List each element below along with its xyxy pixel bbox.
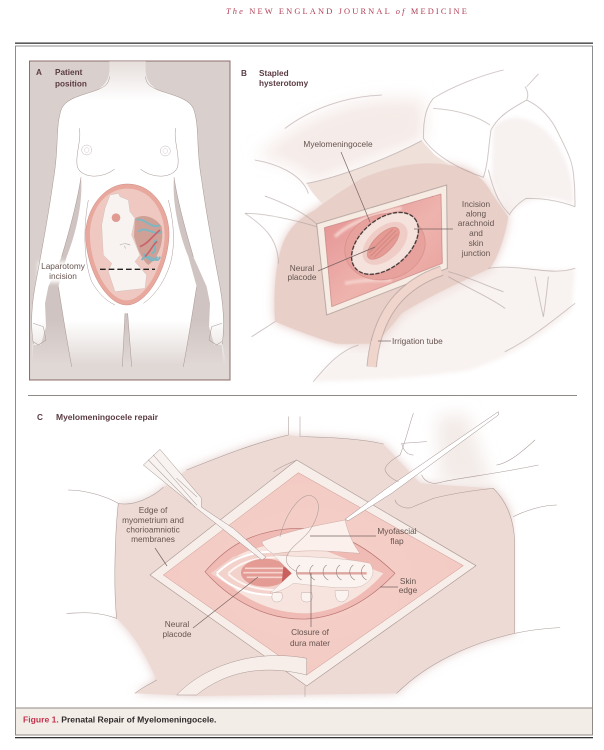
membrane edge label — [122, 505, 184, 566]
dura closure label: dura mater — [290, 638, 330, 648]
incision dashed ellipse — [340, 200, 430, 287]
journal masthead: The NEW ENGLAND JOURNAL of MEDICINE — [226, 7, 469, 16]
incision label: skin — [469, 238, 484, 248]
caption text: Figure 1. Prenatal Repair of Myelomeningocele. — [23, 714, 216, 724]
myofascial flap — [262, 520, 360, 554]
neural placode label — [162, 577, 258, 639]
panel C surgical illustration — [60, 412, 560, 697]
panel C heading: Myelomeningocele repair — [56, 412, 159, 422]
panel A heading: position — [55, 80, 87, 88]
panel A letter: A — [36, 68, 42, 77]
uterus shadow — [274, 163, 508, 344]
membrane edge label: chorioamniotic — [126, 524, 180, 534]
neural placode — [362, 222, 404, 264]
panel B: stapled hysterotomy — [241, 69, 575, 382]
drape shading — [255, 98, 425, 183]
membrane edge label: membranes — [131, 534, 175, 544]
incision label: along — [466, 208, 487, 218]
band above uterus — [307, 141, 452, 203]
irrigation tube — [177, 656, 307, 695]
neural placode concentric folds — [211, 550, 298, 597]
uterus surface — [115, 435, 515, 696]
neural placode label: placode — [287, 272, 317, 282]
placenta — [134, 216, 162, 265]
myelomeningocele label: Myelomeningocele — [303, 139, 373, 149]
myofascial flap label — [310, 526, 417, 546]
fetus — [102, 193, 147, 292]
incision label — [414, 199, 495, 258]
skin edge label: Skin — [400, 576, 416, 586]
panel B heading: hysterotomy — [259, 79, 309, 88]
irrigation tube label: Irrigation tube — [392, 336, 443, 346]
left and right drapes — [60, 491, 560, 633]
panel B heading: Stapled — [259, 69, 289, 78]
divider — [28, 395, 577, 396]
stapled window — [317, 185, 447, 315]
myofascial flap label: Myofascial — [377, 526, 417, 536]
patient body illustration — [31, 61, 229, 379]
neural placode label: Neural — [290, 263, 314, 273]
panel A: patient position — [30, 61, 230, 380]
myelomeningocele — [337, 205, 433, 289]
panel B surgical illustration — [245, 70, 575, 382]
bottom rule — [15, 737, 593, 738]
panel A heading: Patient — [55, 68, 82, 77]
incision label: Incision — [462, 199, 490, 209]
irrigation tube — [372, 271, 442, 367]
hand shadow — [437, 413, 493, 488]
membrane edge label: Edge of — [139, 505, 167, 515]
panel B letter: B — [241, 69, 247, 78]
uterus surface — [274, 163, 508, 344]
incision label: junction — [461, 248, 491, 258]
panel C letter: C — [37, 413, 43, 422]
stapled diamond window — [150, 460, 476, 686]
top rule — [15, 42, 593, 44]
caption band — [16, 708, 592, 735]
incision label: and — [469, 228, 483, 238]
laparotomy label: incision — [49, 271, 77, 281]
drape contour lines — [67, 417, 383, 697]
dura closure — [270, 555, 373, 593]
myelomeningocele label — [303, 139, 373, 222]
skin edge label: edge — [399, 585, 418, 595]
right hand fingers — [385, 413, 538, 508]
incision dashed line — [100, 267, 155, 271]
panel C: myelomeningocele repair — [37, 412, 560, 697]
drape and suture lines — [245, 70, 575, 382]
myofascial flap label: flap — [390, 536, 404, 546]
uterus contours — [397, 488, 560, 693]
membrane edge label: myometrium and — [122, 515, 184, 525]
neural placode label — [287, 247, 375, 282]
dura closure label: Closure of — [291, 627, 329, 637]
left forceps — [143, 449, 266, 560]
wound lens — [205, 528, 395, 619]
dura closure label — [290, 573, 330, 648]
skin edge label — [380, 576, 418, 595]
uterus — [86, 184, 169, 305]
incision label: arachnoid — [458, 218, 495, 228]
panel A background — [30, 61, 230, 380]
right forceps — [345, 412, 498, 521]
neural placode label: placode — [162, 629, 192, 639]
neural placode label: Neural — [165, 619, 189, 629]
uterus shadow — [115, 435, 515, 696]
laparotomy label: Laparotomy — [41, 261, 85, 271]
